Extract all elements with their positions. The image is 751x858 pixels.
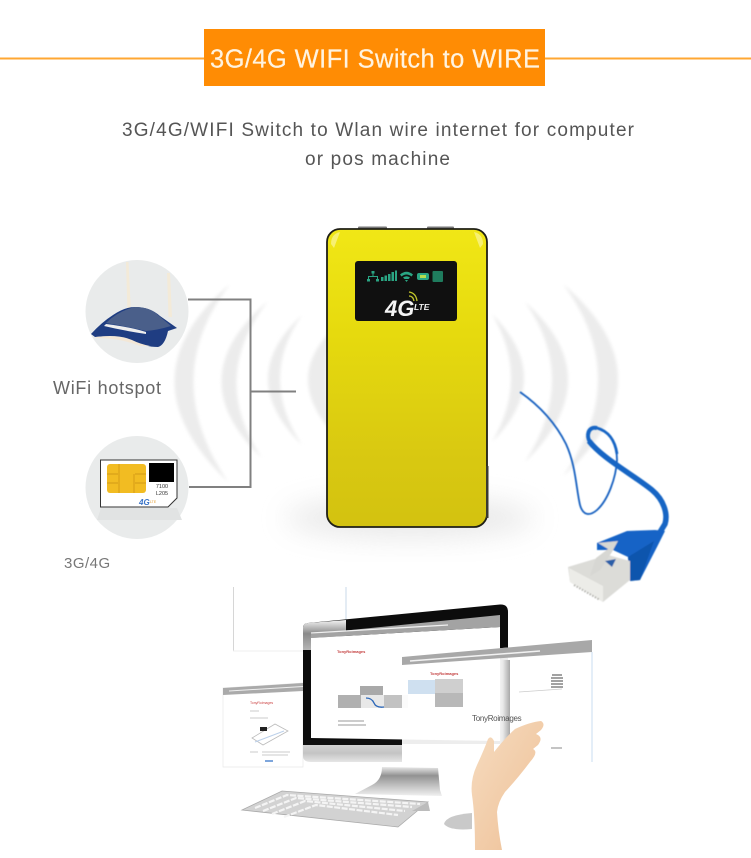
subtitle: or pos machine — [305, 149, 450, 170]
icon: SIM card: L205 — [156, 491, 168, 497]
icon: router — [86, 260, 188, 363]
monitor screen: TonyRoimages — [337, 649, 366, 654]
ethernet cable — [520, 392, 666, 602]
icon: SIM card — [86, 436, 188, 539]
right floating window — [402, 640, 592, 767]
icon: SIM card: 7100 — [156, 484, 168, 490]
connector plug — [568, 555, 630, 602]
right floating window: TonyRoimages — [472, 714, 522, 723]
header rule — [0, 58, 751, 60]
right floating window: TonyRoimages — [430, 671, 459, 676]
computer scene — [223, 587, 592, 850]
hand — [472, 721, 544, 850]
signal waves — [174, 284, 618, 482]
label: 3G/4G: 3G/4G — [64, 555, 111, 572]
device screen: LTE — [414, 302, 430, 312]
left floating window — [223, 683, 303, 767]
device screen — [355, 261, 457, 321]
icon: SIM card: LTE — [150, 500, 157, 504]
subtitle — [122, 120, 635, 170]
monitor stand — [355, 767, 442, 796]
title banner — [204, 29, 545, 86]
mouse — [444, 813, 472, 829]
title banner: 3G/4G WIFI Switch to WIRE — [210, 46, 540, 74]
device shadow — [285, 498, 535, 538]
4G LTE logo: 4G — [384, 296, 414, 321]
icon: SIM card: 4G — [138, 498, 150, 507]
subtitle: 3G/4G/WIFI Switch to Wlan wire internet for computer — [122, 120, 635, 141]
keyboard — [242, 791, 430, 827]
ghost window outline — [232, 587, 234, 651]
left floating window: TonyRoimages — [250, 701, 273, 705]
label: WiFi hotspot: WiFi hotspot — [53, 378, 161, 398]
connector lines — [188, 300, 296, 487]
device — [327, 226, 488, 527]
status icons — [367, 270, 443, 282]
monitor — [303, 604, 508, 762]
monitor screen — [311, 615, 500, 741]
connector hood — [597, 530, 665, 581]
